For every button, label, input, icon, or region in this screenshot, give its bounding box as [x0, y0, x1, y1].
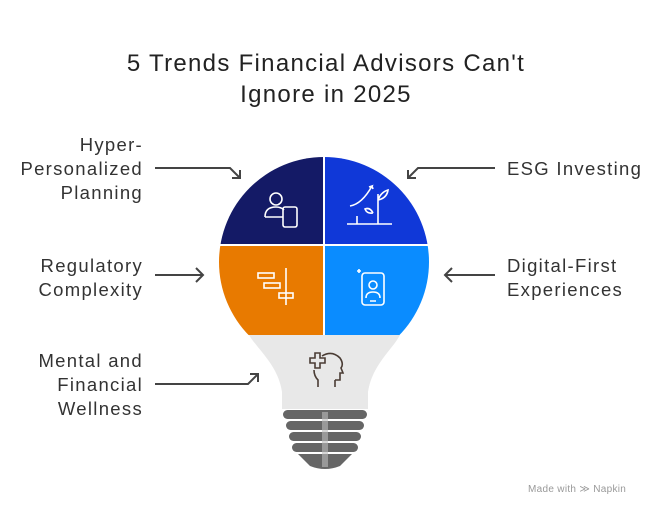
label: digital-first: Digital-First: [507, 255, 617, 276]
label: hyper-personalized: [20, 134, 143, 203]
label: mental wellness: Mental and: [38, 350, 143, 371]
label: hyper-personalized: Planning: [61, 182, 143, 203]
label: hyper-personalized: Hyper-: [80, 134, 143, 155]
arrow: mental: [155, 374, 258, 384]
label: digital-first: Experiences: [507, 279, 623, 300]
label: hyper-personalized: Personalized: [20, 158, 143, 179]
title: 5 Trends Financial Advisors Can't: [127, 50, 525, 77]
label: regulatory: Complexity: [38, 279, 143, 300]
label: regulatory: [38, 255, 143, 300]
label: mental wellness: Wellness: [58, 398, 143, 419]
bulb graphic: [155, 157, 495, 469]
icon: gantt: [258, 268, 293, 305]
arrow: ESG: [408, 168, 495, 178]
bulb base: [283, 410, 367, 469]
icon: growth plant: [347, 186, 392, 224]
bulb quadrants: [219, 157, 429, 335]
arrow: regulatory: [155, 268, 203, 282]
icon: head with plus: [310, 353, 343, 387]
label: regulatory: Regulatory: [41, 255, 143, 276]
arrow: hyper: [155, 168, 240, 178]
label: mental wellness: Financial: [57, 374, 143, 395]
icon: person with tablet: [265, 193, 297, 227]
bulb neck: [249, 335, 400, 409]
label: ESG: ESG Investing: [507, 158, 642, 179]
icon: phone with person: [357, 269, 384, 305]
title: Ignore in 2025: [240, 81, 412, 108]
title: [127, 50, 525, 108]
label: digital-first: [507, 255, 623, 300]
label: mental wellness: [38, 350, 143, 419]
footer: made with napkin: Made with ≫ Napkin: [528, 484, 626, 495]
arrow: digital: [445, 268, 495, 282]
